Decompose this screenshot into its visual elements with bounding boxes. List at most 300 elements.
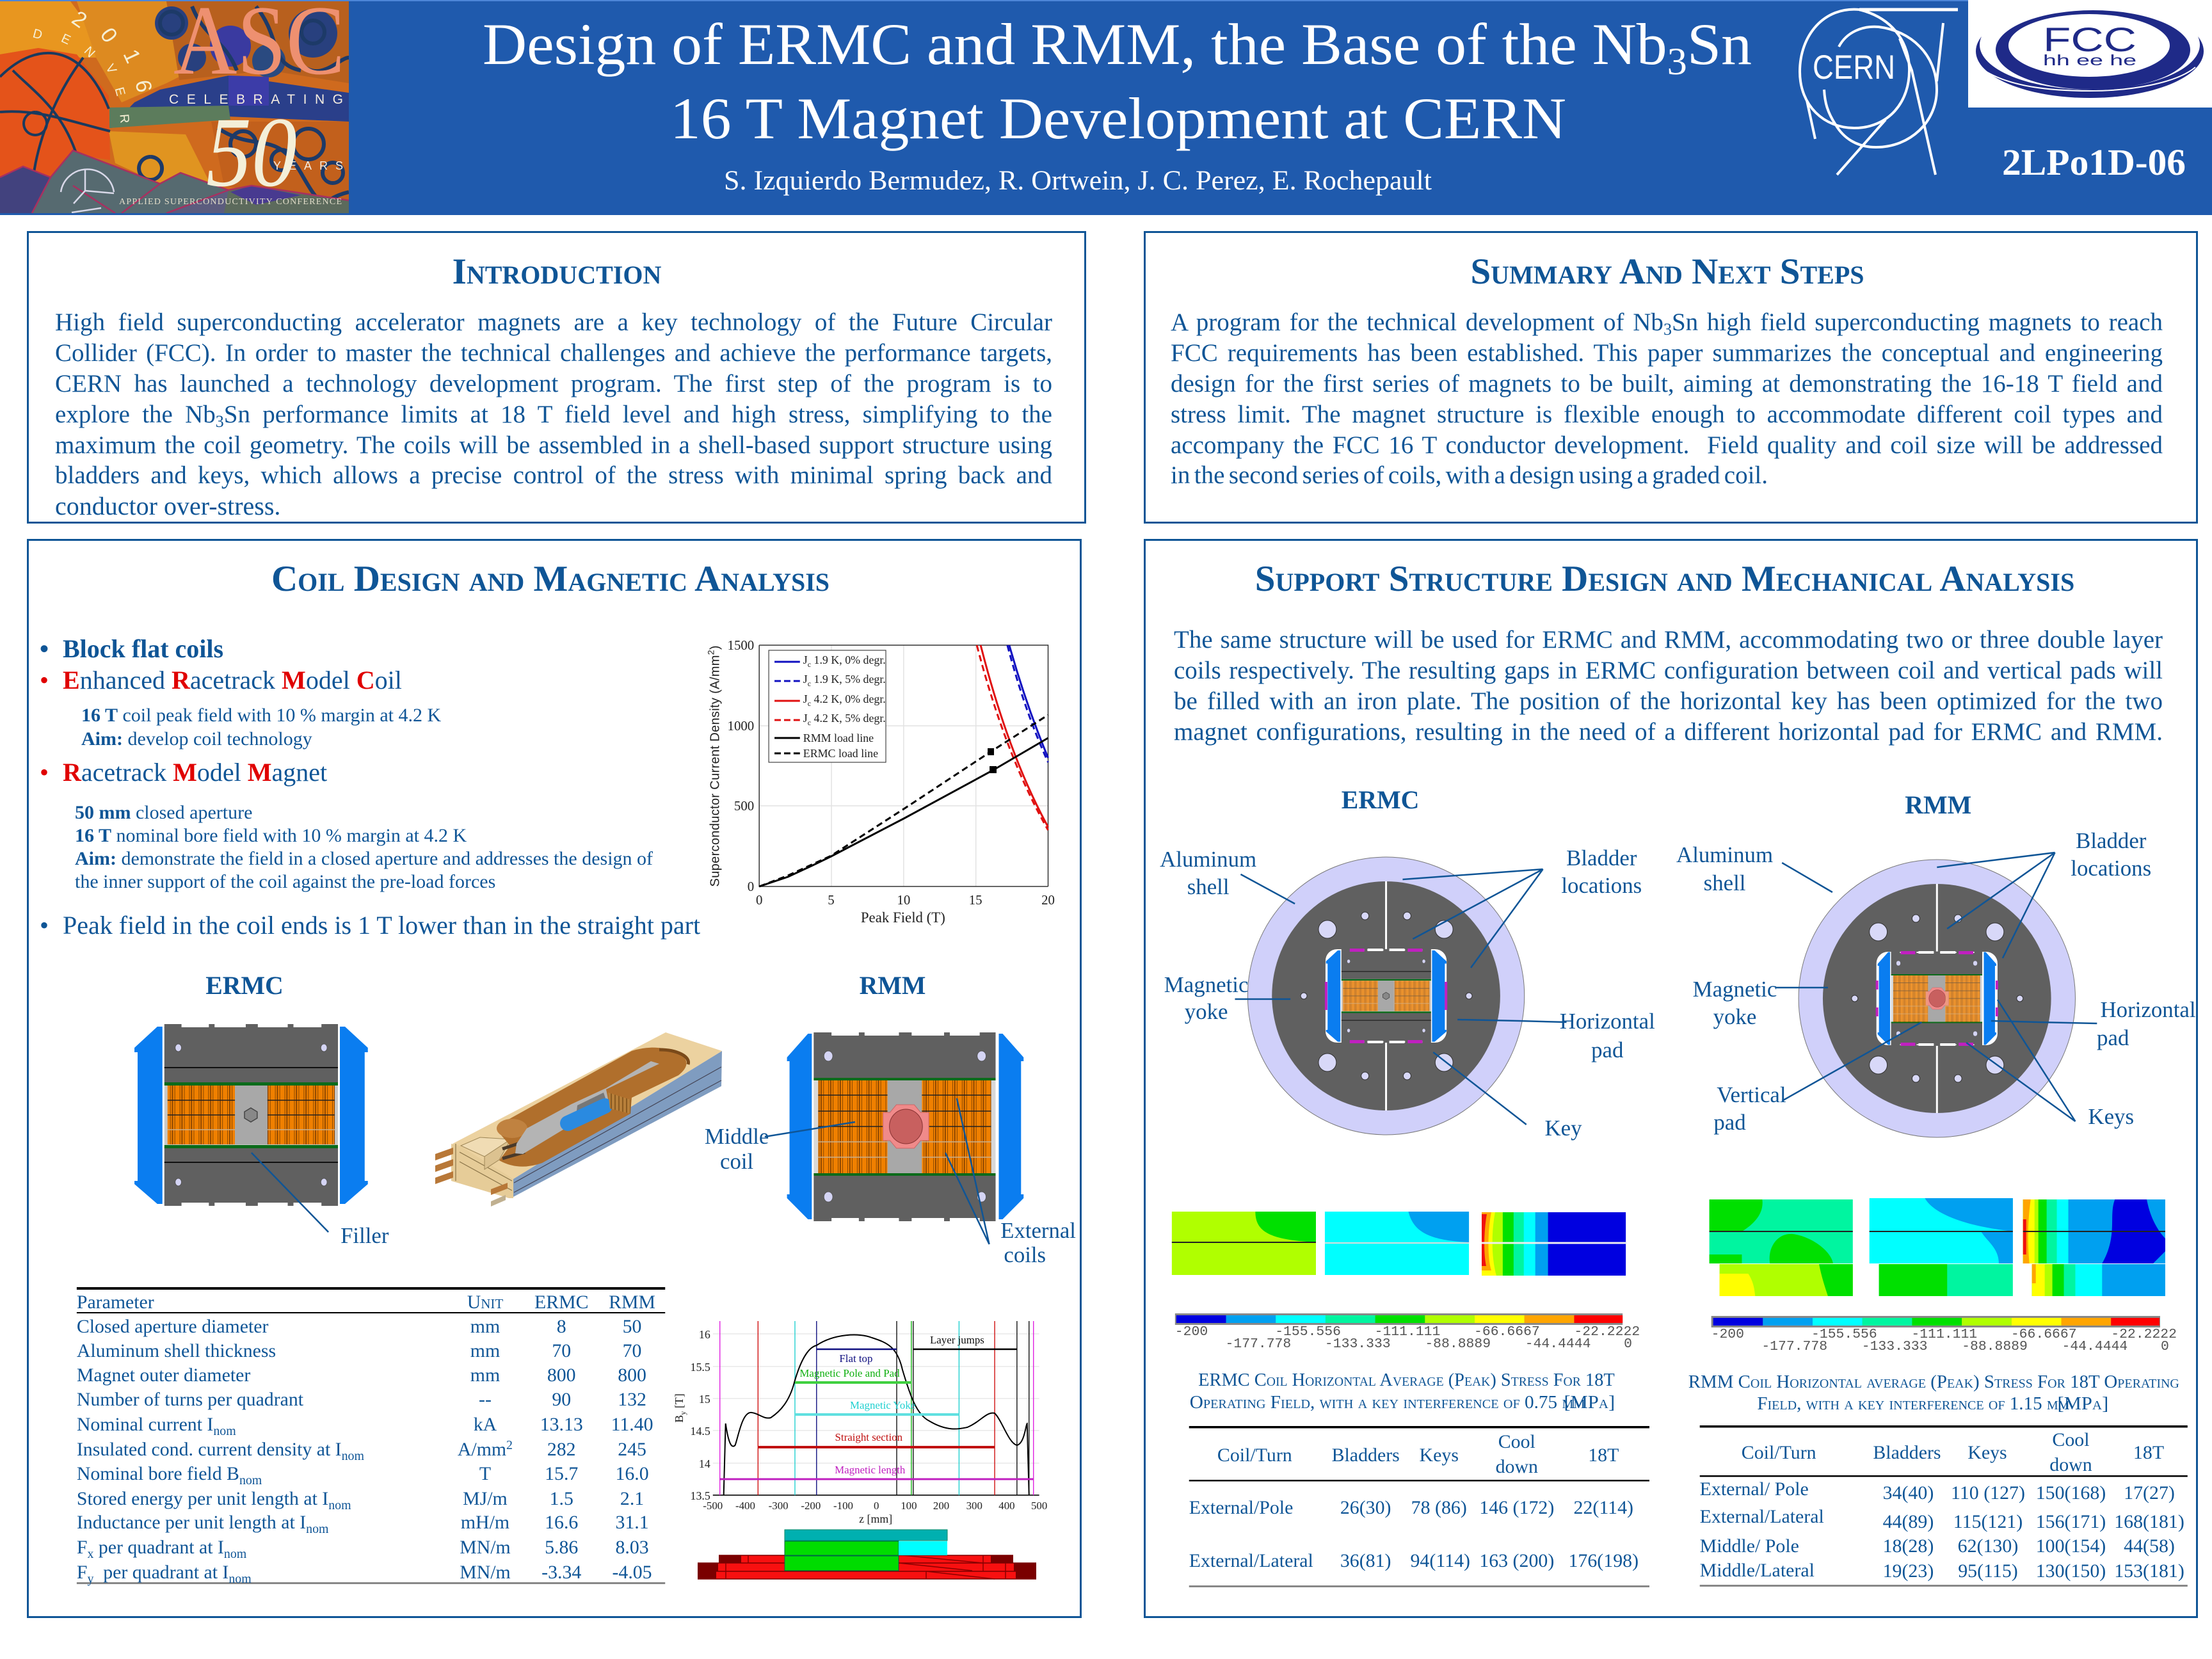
chart: field profile along z: 15.5	[691, 1361, 710, 1374]
colour bar legend: -22.2222	[2111, 1327, 2177, 1342]
table: magnet parameters: MN/m	[460, 1537, 511, 1558]
chart legend: c	[808, 699, 811, 708]
table: magnet parameters: Nominal bore field B	[77, 1463, 239, 1484]
table: RMM coil stresses by step: 110 (127)	[1951, 1482, 2025, 1503]
table: magnet parameters: 11.40	[611, 1414, 653, 1435]
chart: superconductor current density vs peak field: 2	[706, 650, 716, 655]
text block: coil bullets: Peak field in the coil ends is 1 T lower than in the straight part	[63, 911, 700, 940]
text block: coil bullets: Block flat coils	[63, 634, 223, 663]
panel: support structure design and mechanical analysis	[1144, 539, 2198, 1618]
table: ERMC coil stresses by step: 36(81)	[1340, 1550, 1391, 1571]
figure: RMM support structure: Horizontal	[2100, 997, 2196, 1022]
conference logo: ASC 50 years: N	[81, 44, 98, 60]
table: magnet parameters: Parameter	[77, 1292, 154, 1313]
table: ERMC coil stresses by step: Keys	[1420, 1445, 1459, 1466]
text block: summary	[1171, 309, 2163, 489]
chart: field profile along z: -300	[769, 1500, 789, 1512]
conference logo: ASC 50 years	[0, 1, 349, 213]
figure: RMM support structure: Bladder	[2076, 828, 2147, 853]
chart legend: 4.2 K, 0% degr.	[811, 693, 886, 705]
title and authors: S. Izquierdo Bermudez, R. Ortwein, J. C. Perez, E. Rochepault	[724, 166, 1432, 196]
chart: superconductor current density vs peak field: 500	[734, 798, 754, 813]
text block: summary: A program for the technical development of Nb3Sn high field superconducting magnets to reach	[1171, 309, 2163, 339]
chart legend: ERMC load line	[803, 747, 878, 760]
table: magnet parameters: 8	[557, 1316, 566, 1337]
panel: coil design and magnetic analysis: B	[673, 1415, 685, 1423]
table: RMM coil stresses by step: 44(89)	[1883, 1511, 1934, 1532]
figure: RMM cross-section: Middle	[705, 1124, 769, 1149]
table: magnet parameters: F	[77, 1562, 87, 1583]
chart: field profile along z: 0	[874, 1500, 879, 1512]
caption: ERMC stress: Operating Field, with a key interference of 0.75 mm	[1190, 1392, 1585, 1413]
colour bar legend: -177.778	[1761, 1339, 1827, 1354]
chart: RMM stress contours	[1711, 1197, 2166, 1389]
table: RMM coil stresses by step: Bladders	[1873, 1442, 1941, 1463]
table: magnet parameters: -3.34	[541, 1562, 581, 1583]
table: magnet parameters: nom	[239, 1473, 262, 1487]
conference logo: ASC 50 years: R	[116, 113, 132, 124]
chart legend: c	[808, 718, 811, 727]
figure: ERMC support structure: Horizontal	[1560, 1009, 1655, 1034]
table: RMM coil stresses by step: Middle/ Pole	[1700, 1535, 1799, 1557]
table: magnet parameters: nom	[328, 1498, 351, 1512]
chart: field profile along z: -500	[703, 1500, 723, 1512]
table: RMM coil stresses by step: down	[2049, 1454, 2092, 1475]
table: magnet parameters: Closed aperture diameter	[77, 1316, 268, 1337]
figure: RMM cross-section: External	[1000, 1218, 1076, 1243]
table: magnet parameters: 13.13	[540, 1414, 583, 1435]
table: magnet parameters: Stored energy per unit length at I	[77, 1488, 328, 1509]
figure: ERMC cross-section: ERMC	[205, 971, 284, 1000]
table: magnet parameters: 800	[618, 1365, 646, 1386]
table: RMM coil stresses by step: 153(181)	[2114, 1560, 2184, 1582]
figure: RMM support structure: shell	[1704, 870, 1745, 895]
figure: ERMC support structure	[1160, 785, 1655, 1141]
text block: support structure: The same structure will be used for ERMC and RMM, accommodating two or three double layer	[1174, 626, 2163, 653]
table: magnet parameters: 2	[506, 1438, 513, 1452]
chart: superconductor current density vs peak field: Superconductor Current Density (A/mm	[709, 655, 723, 887]
figure: RMM support structure: pad	[2097, 1025, 2129, 1050]
heading: summary: Summary And Next Steps	[1470, 252, 1864, 292]
table: magnet parameters: mH/m	[461, 1512, 509, 1533]
colour bar legend: 0	[1624, 1336, 1632, 1352]
table: magnet parameters: 8.03	[615, 1537, 649, 1558]
table: magnet parameters: x	[87, 1547, 93, 1561]
figure: RMM cross-section: coil	[720, 1149, 753, 1174]
table: magnet parameters: --	[479, 1389, 492, 1410]
chart legend: RMM load line	[803, 732, 874, 744]
conference logo: ASC 50 years: YEARS	[273, 159, 343, 172]
title and authors: Sn	[1687, 12, 1752, 77]
text block: coil bullets: •	[40, 911, 49, 940]
colour bar legend: -88.8889	[1962, 1339, 2028, 1354]
table: magnet parameters: 16.6	[545, 1512, 578, 1533]
caption: ERMC stress: [MPa]	[1564, 1392, 1615, 1413]
figure: RMM support structure: Magnetic	[1693, 977, 1777, 1002]
icon: FCC logo: FCC	[2043, 21, 2136, 59]
colour bar legend: -200	[1711, 1327, 1744, 1342]
table: magnet parameters: RMM	[609, 1292, 655, 1313]
chart: field profile along z: 14.5	[691, 1425, 710, 1438]
chart: field profile along z: -100	[833, 1500, 853, 1512]
conference logo: ASC 50 years: 1	[118, 45, 145, 67]
table: magnet parameters: Magnet outer diameter	[77, 1365, 250, 1386]
table: ERMC coil stresses by step: 94(114)	[1410, 1550, 1470, 1571]
text block: coil bullets: •	[40, 758, 49, 787]
table: ERMC coil stresses by step: down	[1496, 1456, 1538, 1477]
table: magnet parameters: per quadrant at I	[93, 1537, 224, 1558]
conference logo: ASC 50 years: 0	[95, 23, 122, 47]
conference logo: ASC 50 years: CELEBRATING	[169, 92, 343, 107]
figure: ERMC cross-section	[134, 971, 389, 1248]
text block: summary: stress limit. The magnet structure is flexible enough to accommodate different coil types and	[1171, 401, 2163, 428]
text block: introduction: explore the Nb3Sn performance limits at 18 T field level and high stress, simplifying to the	[55, 401, 1052, 431]
icon: CERN logo	[1799, 8, 1958, 175]
table: magnet parameters: A/mm	[458, 1439, 506, 1460]
panel: coil design and magnetic analysis	[27, 539, 1082, 1618]
heading: support structure: Support Structure Design and Mechanical Analysis	[1255, 559, 2074, 599]
figure: ERMC support structure: ERMC	[1342, 785, 1419, 814]
table: magnet parameters: F	[77, 1537, 87, 1558]
figure: RMM cross-section	[705, 971, 1076, 1267]
table: magnet parameters: Inductance per unit length at I	[77, 1512, 306, 1533]
figure: ERMC support structure: Aluminum	[1160, 847, 1256, 872]
table: RMM coil stresses by step: 18(28)	[1883, 1535, 1934, 1557]
table: RMM coil stresses by step: Cool	[2052, 1429, 2090, 1450]
table: RMM coil stresses by step: 44(58)	[2124, 1535, 2175, 1557]
table: RMM coil stresses by step: 156(171)	[2036, 1511, 2106, 1532]
chart legend: 4.2 K, 5% degr.	[811, 712, 886, 725]
chart: field profile along z: 300	[966, 1500, 982, 1512]
colour bar legend: -133.333	[1862, 1339, 1927, 1354]
text block: introduction	[55, 309, 1052, 520]
figure: ERMC support structure: shell	[1187, 874, 1230, 899]
chart legend: c	[808, 660, 811, 669]
colour bar legend	[1175, 1313, 1640, 1352]
figure: coil end layout	[698, 1530, 1036, 1580]
chart: field profile along z: z [mm]	[859, 1512, 892, 1525]
icon: CERN logo: CERN	[1813, 49, 1895, 86]
table: magnet parameters: nom	[213, 1424, 236, 1438]
table: magnet parameters: 50	[623, 1316, 641, 1337]
table: magnet parameters: Number of turns per quadrant	[77, 1389, 304, 1410]
table: magnet parameters: 2.1	[620, 1488, 644, 1509]
colour bar legend: -111.111	[1375, 1324, 1440, 1340]
colour bar legend: -133.333	[1325, 1336, 1391, 1352]
chart: superconductor current density vs peak field: 1500	[728, 637, 754, 653]
caption: RMM stress: [MPa]	[2058, 1393, 2108, 1414]
chart legend: 1.9 K, 5% degr.	[811, 673, 886, 685]
text block: introduction: maximum the coil geometry. The coils will be assembled in a shell-based support structure using	[55, 431, 1052, 459]
table: magnet parameters: 70	[623, 1340, 641, 1361]
chart legend: J	[803, 693, 808, 705]
chart: field profile along z: 400	[998, 1500, 1015, 1512]
table: magnet parameters: kA	[474, 1414, 497, 1435]
table: magnet parameters: nom	[228, 1572, 252, 1586]
conference logo: ASC 50 years: E	[112, 86, 127, 97]
figure: RMM support structure: pad	[1713, 1110, 1746, 1135]
figure: ERMC cross-section: Filler	[341, 1223, 389, 1248]
title and authors: Design of ERMC and RMM, the Base of the Nb	[483, 12, 1621, 77]
chart legend: c	[808, 679, 811, 688]
text block: introduction: Collider (FCC). In order to master the technical challenges and achieve the performance targets,	[55, 339, 1052, 367]
table: RMM coil stresses by step: 17(27)	[2124, 1482, 2175, 1503]
table: magnet parameters: Nominal current I	[77, 1414, 213, 1435]
text block: coil bullets: Aim: demonstrate the field in a closed aperture and addresses the design of	[75, 848, 653, 869]
text block: coil bullets: •	[40, 666, 49, 694]
figure: RMM support structure: RMM	[1905, 790, 1971, 819]
chart: superconductor current density vs peak field: 0	[748, 879, 754, 894]
colour bar legend: -200	[1175, 1324, 1208, 1340]
chart: field profile along z: Layer jumps	[930, 1334, 984, 1346]
table: magnet parameters: Insulated cond. current density at I	[77, 1439, 342, 1460]
chart legend: J	[803, 673, 808, 685]
chart: field profile along z: 100	[901, 1500, 917, 1512]
table: ERMC coil stresses by step: Bladders	[1332, 1445, 1400, 1466]
table: magnet parameters: 245	[618, 1439, 646, 1460]
text block: coil bullets: 50 mm closed aperture	[75, 802, 252, 823]
chart: field profile along z: 13.5	[691, 1489, 710, 1502]
chart: superconductor current density vs peak field: 5	[828, 892, 835, 908]
figure: ERMC support structure: locations	[1561, 873, 1642, 898]
chart legend: J	[803, 712, 808, 725]
table: magnet parameters: 90	[552, 1389, 571, 1410]
chart: superconductor current density vs peak field: 20	[1041, 892, 1055, 908]
figure: RMM cross-section: RMM	[860, 971, 926, 1000]
text block: summary: design for the first series of magnets to be built, aiming at demonstrating the 16-18 T field and	[1171, 370, 2163, 397]
text block: coil bullets: 16 T coil peak field with 10 % margin at 4.2 K	[81, 705, 441, 726]
chart: field profile along z	[673, 1321, 1047, 1525]
colour bar legend: -111.111	[1911, 1327, 1977, 1342]
text block: introduction: bladders and keys, which allows a precise control of the stress with minimal spring back and	[55, 461, 1052, 489]
figure: RMM support structure: Keys	[2088, 1104, 2134, 1129]
conference logo: ASC 50 years: 50	[206, 97, 297, 207]
conference logo: ASC 50 years: D	[31, 26, 44, 42]
heading: coil design: Coil Design and Magnetic Analysis	[271, 559, 830, 599]
table: magnet parameters	[77, 1287, 666, 1586]
caption: ERMC stress: ERMC Coil Horizontal Average (Peak) Stress For 18T	[1198, 1370, 1615, 1390]
colour bar legend: -44.4444	[2062, 1339, 2128, 1354]
table: RMM coil stresses by step: 100(154)	[2036, 1535, 2106, 1557]
chart: field profile along z: Flat top	[839, 1352, 872, 1365]
table: RMM coil stresses by step: Keys	[1968, 1442, 2007, 1463]
table: magnet parameters: 132	[618, 1389, 646, 1410]
table: magnet parameters: nom	[342, 1449, 364, 1463]
table: magnet parameters: Aluminum shell thickness	[77, 1340, 276, 1361]
figure: RMM support structure	[1669, 776, 2193, 1153]
table: RMM coil stresses by step: Coil/Turn	[1742, 1442, 1816, 1463]
text block: coil bullets: the inner support of the coil against the pre-load forces	[75, 871, 495, 892]
table: RMM coil stresses by step: 19(23)	[1883, 1560, 1934, 1582]
table: magnet parameters: nom	[306, 1522, 329, 1536]
table: magnet parameters: 15.7	[545, 1463, 578, 1484]
table: magnet parameters: MN/m	[460, 1562, 511, 1583]
table: ERMC coil stresses by step: Cool	[1498, 1431, 1535, 1452]
text block: introduction: CERN has launched a technology development program. The first step of the program is to	[55, 370, 1052, 397]
chart: field profile along z: 200	[933, 1500, 949, 1512]
table: RMM coil stresses by step: 130(150)	[2036, 1560, 2106, 1582]
header banner	[0, 0, 2212, 215]
icon: FCC logo	[1968, 0, 2212, 108]
text block: coil bullets: •	[40, 634, 49, 663]
chart: field profile along z: -200	[801, 1500, 821, 1512]
chart: superconductor current density vs peak field: Peak Field (T)	[861, 910, 945, 926]
table: RMM coil stresses by step: 62(130)	[1958, 1535, 2018, 1557]
table: ERMC coil stresses by step: 18T	[1588, 1445, 1619, 1466]
caption: RMM stress: RMM Coil Horizontal average (Peak) Stress For 18T Operating	[1688, 1372, 2179, 1392]
colour bar legend: -66.6667	[1474, 1324, 1540, 1340]
table: RMM coil stresses by step	[1701, 1425, 2193, 1594]
table: ERMC coil stresses by step: External/Pole	[1189, 1497, 1293, 1518]
colour bar legend	[1711, 1316, 2177, 1354]
table: magnet parameters: 282	[547, 1439, 576, 1460]
table: magnet parameters: 31.1	[615, 1512, 649, 1533]
table: magnet parameters: mm	[470, 1365, 500, 1386]
figure: ERMC support structure: Bladder	[1566, 846, 1637, 870]
colour bar legend: -155.556	[1275, 1324, 1341, 1340]
text block: introduction: High field superconducting accelerator magnets are a key technology of the Future Circular	[55, 309, 1052, 336]
conference logo: ASC 50 years: 6	[131, 78, 156, 94]
chart: superconductor current density vs peak field: )	[709, 646, 723, 650]
colour bar legend: -177.778	[1226, 1336, 1291, 1352]
table: RMM coil stresses by step: 18T	[2133, 1442, 2164, 1463]
figure: ERMC support structure: Magnetic	[1164, 972, 1248, 997]
text block: coil bullets: Enhanced Racetrack Model Coil	[63, 666, 402, 694]
chart: superconductor current density vs peak field: 0	[756, 892, 762, 908]
figure: RMM support structure: Vertical	[1717, 1082, 1786, 1107]
title and authors: 3	[1667, 40, 1687, 83]
table: RMM coil stresses by step: 34(40)	[1883, 1482, 1934, 1503]
text block: support structure: coils respectively. The resulting gaps in ERMC configuration between coil and vertical pads will	[1174, 657, 2163, 684]
text block: support structure: magnet configurations, resulting in the need of a different horizontal pad for ERMC and RMM.	[1174, 718, 2163, 746]
table: ERMC coil stresses by step	[1189, 1425, 1656, 1595]
colour bar legend: -155.556	[1811, 1327, 1877, 1342]
icon: FCC logo: hh ee he	[2043, 52, 2136, 68]
table: magnet parameters: 70	[552, 1340, 571, 1361]
table: magnet parameters: mm	[470, 1340, 500, 1361]
chart: field profile along z: y	[678, 1411, 687, 1415]
panel: summary and next steps	[1144, 231, 2198, 524]
table: RMM coil stresses by step: 95(115)	[1958, 1560, 2018, 1582]
table: RMM coil stresses by step: 150(168)	[2036, 1482, 2106, 1503]
chart: field profile along z: 500	[1031, 1500, 1047, 1512]
chart: field profile along z: Straight section	[835, 1431, 903, 1443]
table: magnet parameters: ERMC	[534, 1292, 588, 1313]
chart: superconductor current density vs peak field: 1000	[728, 718, 754, 733]
table: ERMC coil stresses by step: External/Lateral	[1189, 1550, 1313, 1571]
figure: RMM support structure: Aluminum	[1676, 842, 1773, 867]
table: ERMC coil stresses by step: 22(114)	[1574, 1497, 1633, 1518]
chart: field profile along z: 15	[699, 1393, 710, 1406]
chart legend	[769, 650, 886, 762]
chart: field profile along z: Magnetic length	[835, 1464, 906, 1476]
caption: RMM stress: Field, with a key interference of 1.15 mm	[1757, 1393, 2070, 1414]
table: ERMC coil stresses by step: 176(198)	[1568, 1550, 1639, 1571]
chart: superconductor current density vs peak field	[706, 637, 1055, 926]
poster number: 2LPo1D-06	[2002, 141, 2186, 183]
text block: introduction: conductor over-stress.	[55, 492, 280, 520]
text block: support structure: be filled with an iron plate. The position of the horizontal key has been optimized for the two	[1174, 687, 2163, 715]
chart: field profile along z: Magnetic Yoke	[850, 1399, 915, 1411]
figure: ERMC support structure: yoke	[1185, 999, 1228, 1024]
table: magnet parameters: 16.0	[615, 1463, 649, 1484]
chart: field profile along z: 16	[699, 1328, 710, 1341]
text block: coil bullets	[40, 634, 700, 940]
heading: introduction: Introduction	[453, 252, 661, 292]
text block: summary: accompany the FCC 16 T conductor development. Field quality and coil size will be addressed	[1171, 431, 2163, 459]
table: ERMC coil stresses by step: 163 (200)	[1479, 1550, 1554, 1571]
table: magnet parameters: nom	[224, 1547, 247, 1561]
table: ERMC coil stresses by step: 146 (172)	[1479, 1497, 1554, 1518]
colour bar legend: -44.4444	[1525, 1336, 1591, 1352]
table: ERMC coil stresses by step: 26(30)	[1340, 1497, 1391, 1518]
figure: ERMC support structure: pad	[1591, 1038, 1624, 1062]
chart legend: 1.9 K, 0% degr.	[811, 653, 886, 666]
panel: introduction	[27, 231, 1086, 524]
table: magnet parameters: -4.05	[613, 1562, 652, 1583]
title and authors	[483, 12, 1752, 196]
figure: RMM cross-section: coils	[1004, 1242, 1046, 1267]
table: magnet parameters: 800	[547, 1365, 576, 1386]
table: magnet parameters: mm	[470, 1316, 500, 1337]
text block: coil bullets: Racetrack Model Magnet	[63, 758, 327, 787]
chart legend: J	[803, 653, 808, 666]
table: magnet parameters: MJ/m	[463, 1488, 508, 1509]
chart: superconductor current density vs peak field: 10	[897, 892, 910, 908]
figure: RMM support structure: locations	[2071, 856, 2151, 881]
table: RMM coil stresses by step: Middle/Lateral	[1700, 1560, 1815, 1581]
table: RMM coil stresses by step: 168(181)	[2114, 1511, 2184, 1532]
chart: field profile along z: -400	[735, 1500, 755, 1512]
colour bar legend: -66.6667	[2011, 1327, 2077, 1342]
panel: coil design and magnetic analysis: [T]	[673, 1393, 685, 1411]
colour bar legend: 0	[2161, 1339, 2169, 1354]
table: magnet parameters: y	[87, 1572, 93, 1586]
text block: coil bullets: 16 T nominal bore field with 10 % margin at 4.2 K	[75, 825, 467, 846]
table: magnet parameters: 5.86	[545, 1537, 578, 1558]
conference logo: ASC 50 years: APPLIED SUPERCONDUCTIVITY CONFERENCE	[119, 197, 342, 207]
figure: RMM support structure: yoke	[1713, 1004, 1756, 1029]
figure: ERMC support structure: Key	[1544, 1116, 1582, 1141]
colour bar legend: -22.2222	[1574, 1324, 1640, 1340]
chart: field profile along z: 14	[699, 1457, 710, 1470]
table: magnet parameters: per quadrant at I	[93, 1562, 228, 1583]
caption: ERMC stress	[1182, 1371, 1669, 1422]
text block: support structure	[1174, 626, 2163, 746]
table: magnet parameters: 1.5	[550, 1488, 573, 1509]
table: magnet parameters: Unit	[467, 1292, 503, 1313]
colour bar legend: -88.8889	[1425, 1336, 1491, 1352]
chart: field profile along z: Magnetic Pole and Pad	[799, 1367, 900, 1379]
chart: superconductor current density vs peak field: 15	[969, 892, 982, 908]
chart: ERMC stress contours	[1172, 1211, 1633, 1384]
figure: 3D coil assembly	[435, 1032, 722, 1206]
table: ERMC coil stresses by step: Coil/Turn	[1217, 1445, 1292, 1466]
table: RMM coil stresses by step: External/Lateral	[1700, 1506, 1824, 1527]
caption: RMM stress	[1688, 1371, 2187, 1422]
text block: coil bullets: Aim: develop coil technology	[81, 728, 312, 749]
table: magnet parameters: T	[479, 1463, 491, 1484]
table: RMM coil stresses by step: External/ Pole	[1700, 1479, 1809, 1500]
text block: summary: in the second series of coils, with a design using a graded coil.	[1171, 461, 1768, 489]
conference logo: ASC 50 years: 2	[67, 6, 92, 33]
table: ERMC coil stresses by step: 78 (86)	[1411, 1497, 1467, 1518]
title and authors: 16 T Magnet Development at CERN	[670, 86, 1566, 151]
conference logo: ASC 50 years: V	[102, 61, 119, 77]
table: RMM coil stresses by step: 115(121)	[1953, 1511, 2023, 1532]
text block: summary: FCC requirements has been established. This paper summarizes the conceptual and engineering	[1171, 339, 2163, 367]
conference logo: ASC 50 years: E	[59, 31, 73, 47]
